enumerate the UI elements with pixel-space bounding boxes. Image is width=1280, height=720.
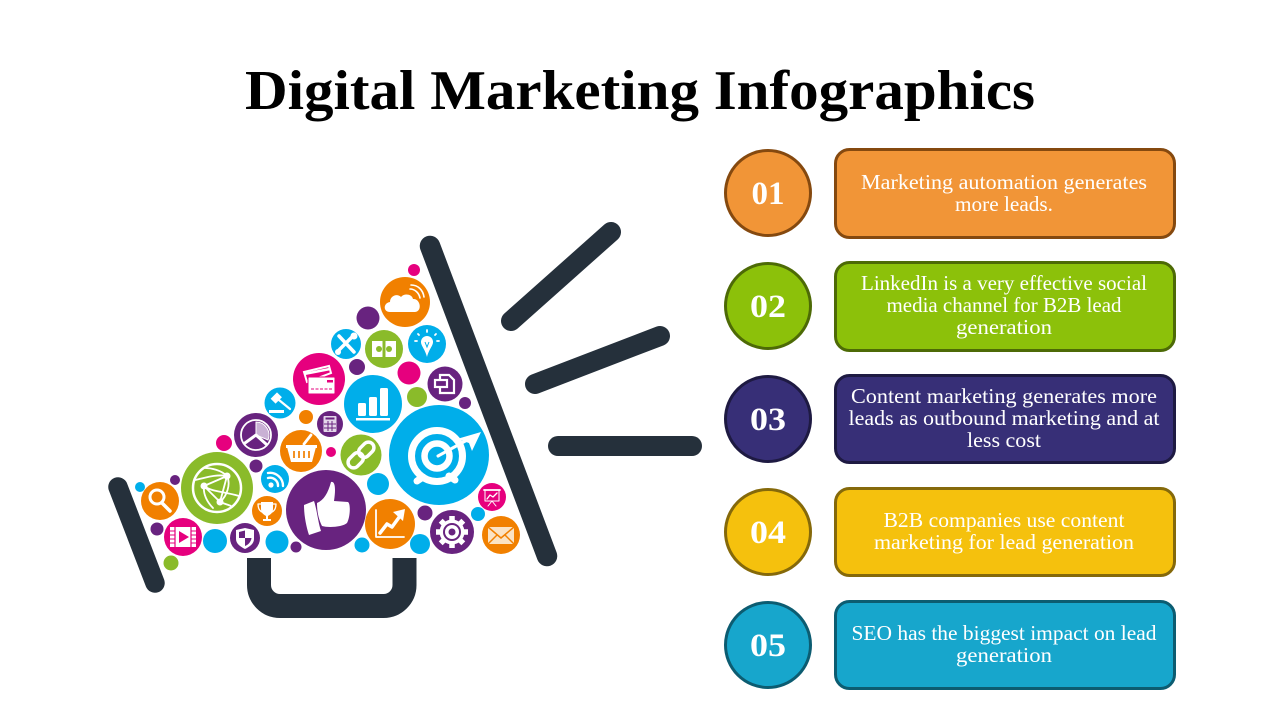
- text box 01: [836, 150, 1174, 238]
- title: Digital Marketing Infographics: [245, 60, 1035, 122]
- number badge 03: 03: [750, 402, 786, 438]
- number badge 04: 04: [750, 515, 786, 551]
- icon: shield: [230, 523, 260, 553]
- sound ray top: [511, 232, 611, 321]
- icon: chain link: [340, 434, 382, 476]
- icon: gear: [430, 510, 474, 554]
- icon: envelope: [482, 516, 520, 554]
- number badge 02: 02: [750, 289, 786, 325]
- text box 04: [836, 488, 1174, 576]
- decorative dots: [135, 264, 485, 570]
- text box 02: [836, 262, 1174, 350]
- icon: cloud: [380, 277, 430, 327]
- number badge 03: [726, 376, 810, 462]
- number badge 04: [726, 490, 810, 574]
- icon: gavel: [264, 388, 296, 418]
- item 01: [726, 150, 1174, 238]
- text box 02: LinkedIn is a very effective social: [861, 271, 1147, 295]
- megaphone front bar: [430, 246, 547, 556]
- text box 03: [836, 376, 1174, 462]
- icon: trophy: [252, 496, 282, 526]
- text box 05: generation: [956, 643, 1053, 667]
- text box 05: SEO has the biggest impact on lead: [852, 621, 1157, 645]
- text box 03: less cost: [967, 428, 1041, 452]
- icon: money: [365, 330, 403, 368]
- icon: target with arrow: [389, 405, 489, 505]
- icon: light bulb: [408, 325, 446, 363]
- text box 03: leads as outbound marketing and at: [848, 406, 1160, 430]
- text box 01: more leads.: [955, 192, 1053, 216]
- item 03: [726, 376, 1174, 462]
- icon: video: [164, 518, 202, 556]
- text box 03: Content marketing generates more: [851, 384, 1157, 408]
- sound ray bottom: [558, 436, 692, 456]
- icon: bar chart: [344, 375, 402, 433]
- number badge 02: [726, 264, 810, 348]
- icon: rss: [261, 465, 289, 493]
- megaphone grip: [259, 558, 405, 606]
- number badge 01: [726, 150, 810, 236]
- text box 05: [836, 602, 1174, 688]
- item 02: [726, 262, 1174, 350]
- item 05: [726, 602, 1174, 688]
- sound ray middle: [535, 336, 660, 384]
- megaphone handle bar: [118, 487, 155, 583]
- text box 01: Marketing automation generates: [861, 170, 1147, 194]
- icon: document: [428, 366, 462, 402]
- icon: calculator: [317, 411, 343, 437]
- icon: growth chart: [365, 499, 415, 549]
- icon: search: [141, 482, 179, 520]
- icon: tools: [331, 329, 361, 359]
- number badge 05: 05: [750, 628, 786, 664]
- number badge 05: [726, 602, 810, 688]
- text box 04: marketing for lead generation: [874, 530, 1135, 554]
- icon: credit cards: [293, 353, 345, 405]
- item 04: [726, 488, 1174, 576]
- icon: presentation board: [478, 483, 506, 511]
- icon: shopping basket: [280, 430, 322, 472]
- text box 02: generation: [956, 315, 1053, 339]
- icon: pie chart: [234, 413, 278, 457]
- megaphone illustration: [118, 232, 692, 606]
- text box 04: B2B companies use content: [884, 508, 1125, 532]
- icon: thumbs up: [286, 470, 366, 550]
- icon: globe network: [181, 452, 253, 524]
- text box 02: media channel for B2B lead: [886, 293, 1122, 317]
- number badge 01: 01: [752, 176, 784, 212]
